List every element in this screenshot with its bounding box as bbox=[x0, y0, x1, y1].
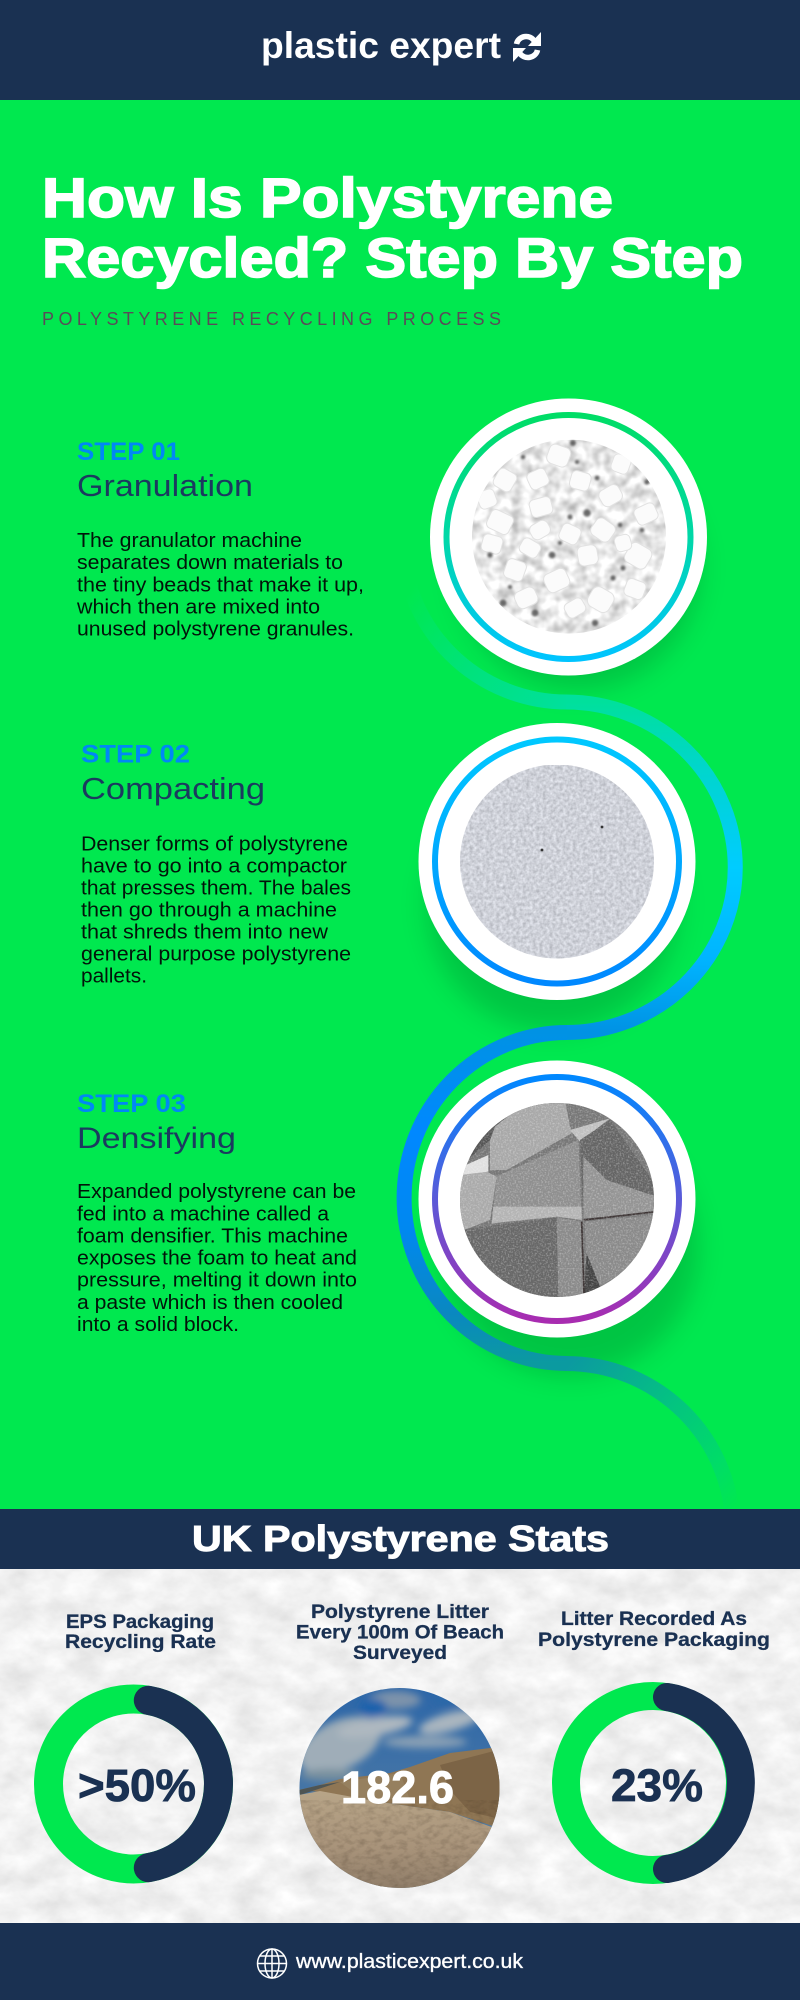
stat 2 label: Polystyrene Litter bbox=[311, 1601, 489, 1623]
header bar bbox=[0, 0, 800, 100]
step 2 body: that shreds them into new bbox=[81, 922, 329, 944]
step 2 body: then go through a machine bbox=[81, 900, 337, 922]
step 2 text block bbox=[81, 740, 351, 988]
stat 1 label bbox=[65, 1611, 216, 1653]
green background panel bbox=[0, 100, 800, 1509]
step 3 body: into a solid block. bbox=[77, 1314, 239, 1336]
circle shadows bbox=[427, 446, 700, 1376]
title: Recycled? Step By Step bbox=[42, 226, 743, 289]
donut chart: 23%: 23% bbox=[611, 1760, 703, 1811]
stat 2 label: Surveyed bbox=[353, 1642, 447, 1664]
footer url: www.plasticexpert.co.uk bbox=[295, 1951, 524, 1973]
step 2 circle: beads photo bbox=[418, 723, 696, 1000]
donut chart: >50% bbox=[48, 1699, 218, 1869]
step 3 body: a paste which is then cooled bbox=[77, 1292, 343, 1314]
step 1 label: STEP 01 bbox=[77, 438, 180, 466]
title: How Is Polystyrene bbox=[42, 166, 613, 229]
step 1 heading: Granulation bbox=[77, 468, 253, 503]
step 2 body: pallets. bbox=[81, 966, 147, 988]
step 3 body: Expanded polystyrene can be bbox=[77, 1181, 356, 1203]
step 1 text block bbox=[76, 438, 364, 640]
step 3 body: pressure, melting it down into bbox=[77, 1270, 357, 1292]
step 2 label: STEP 02 bbox=[81, 740, 190, 768]
step 1 circle: granules photo bbox=[430, 398, 707, 676]
icon: recycle arrows bbox=[513, 32, 541, 62]
beach photo with stat 182.6: 182.6 bbox=[341, 1762, 454, 1813]
step 3 body: fed into a machine called a bbox=[77, 1204, 330, 1226]
stats panel: foam texture background bbox=[0, 1569, 800, 1923]
step 2 body bbox=[81, 834, 351, 988]
step 1 body: which then are mixed into bbox=[76, 596, 320, 618]
title bbox=[42, 166, 743, 289]
stat 1 label: EPS Packaging bbox=[66, 1611, 214, 1633]
step 3 label: STEP 03 bbox=[77, 1090, 186, 1118]
step 3 body: exposes the foam to heat and bbox=[77, 1248, 357, 1270]
winding gradient ribbon bbox=[402, 537, 735, 1530]
stat 1 label: Recycling Rate bbox=[65, 1631, 216, 1653]
stat 2 label bbox=[296, 1601, 504, 1664]
icon: globe bbox=[258, 1949, 286, 1978]
step 1 body: the tiny beads that make it up, bbox=[77, 574, 364, 596]
stat 3 label: Polystyrene Packaging bbox=[538, 1629, 770, 1651]
step 2 body: Denser forms of polystyrene bbox=[81, 834, 348, 856]
donut chart: 23% bbox=[566, 1696, 741, 1870]
step 2 body: that presses them. The bales bbox=[81, 878, 351, 900]
step 3 heading: Densifying bbox=[77, 1122, 236, 1155]
stat 3 label bbox=[538, 1608, 770, 1651]
beach photo with stat 182.6 bbox=[300, 1688, 500, 1888]
donut chart: >50%: >50% bbox=[78, 1760, 196, 1811]
step 1 body bbox=[76, 530, 364, 640]
logo wordmark: plastic expert bbox=[261, 25, 501, 66]
step 3 circle: foam blocks photo bbox=[418, 1060, 696, 1338]
step 1 body: unused polystyrene granules. bbox=[77, 618, 354, 640]
step 3 body: foam densifier. This machine bbox=[77, 1226, 348, 1248]
stat 3 label: Litter Recorded As bbox=[561, 1608, 747, 1630]
step 2 body: have to go into a compactor bbox=[81, 856, 347, 878]
stats heading band bbox=[0, 1509, 800, 1569]
step 1 body: separates down materials to bbox=[77, 552, 343, 574]
step 3 text block bbox=[77, 1090, 357, 1336]
step 2 heading: Compacting bbox=[81, 771, 265, 806]
step 3 body bbox=[77, 1181, 357, 1336]
step 1 body: The granulator machine bbox=[77, 530, 302, 552]
stat 2 label: Every 100m Of Beach bbox=[296, 1622, 504, 1644]
stats heading: UK Polystyrene Stats bbox=[192, 1518, 609, 1559]
subtitle: POLYSTYRENE RECYCLING PROCESS bbox=[42, 309, 501, 329]
step 2 body: general purpose polystyrene bbox=[81, 944, 351, 966]
footer bar bbox=[0, 1923, 800, 2000]
